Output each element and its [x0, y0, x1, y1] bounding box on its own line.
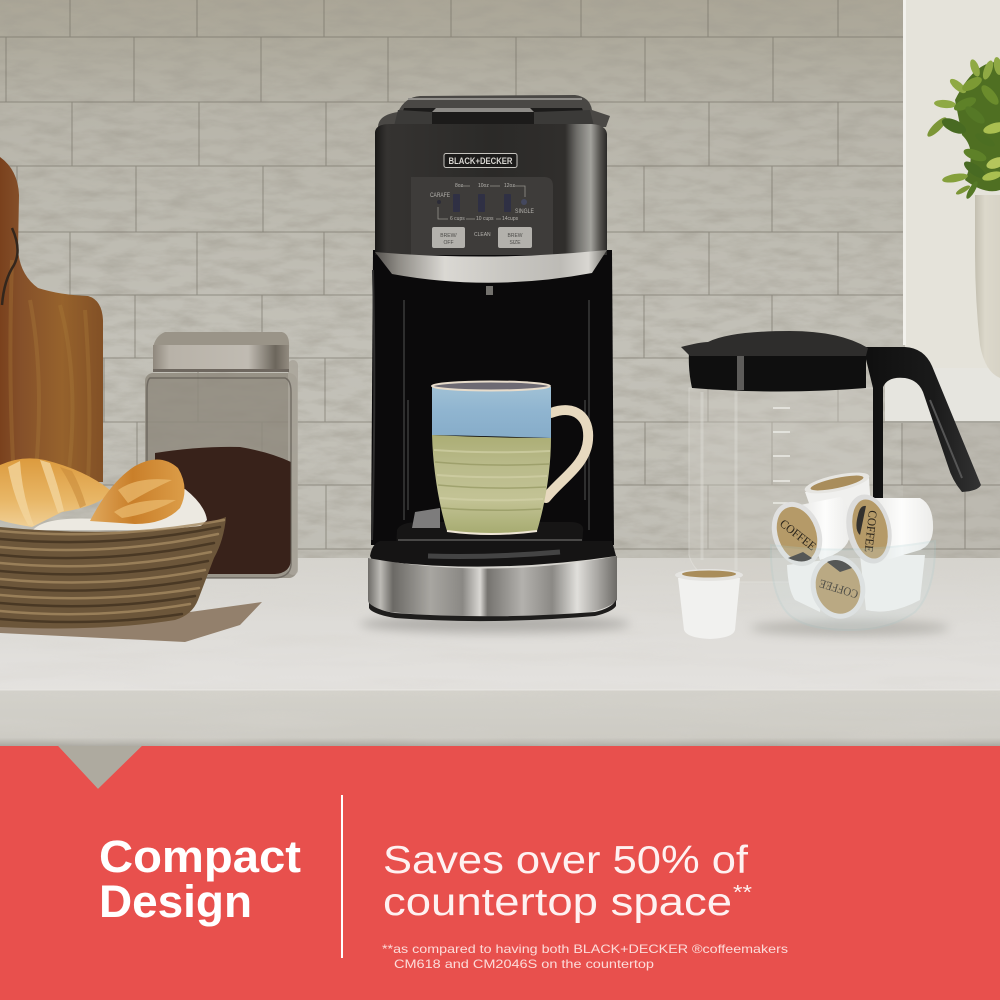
control labels: 6 cups: [450, 216, 465, 222]
right pod: [840, 490, 933, 568]
glass jar of ground coffee: [145, 332, 298, 578]
footnote: [382, 942, 788, 971]
mug green band: [432, 435, 551, 534]
main claim: Saves over 50% of: [383, 839, 748, 882]
drip tray: [396, 522, 583, 550]
glass bowl: [771, 541, 935, 630]
carafe glass: [689, 388, 876, 582]
control labels: 10 cups: [476, 216, 494, 222]
control labels: 12oz: [504, 183, 515, 189]
carafe handle: [863, 347, 981, 505]
coffee maker: [368, 95, 617, 621]
control labels: CLEAN: [474, 232, 491, 238]
basket: [0, 517, 226, 628]
ground coffee: [155, 447, 291, 574]
right pod: COFFEE: [862, 510, 880, 553]
footnote: **as compared to having both BLACK+DECKER ®coffeemakers: [382, 942, 788, 956]
main claim: countertop space: [383, 881, 732, 924]
brew off button: BREW/: [440, 233, 457, 239]
base ledge: [370, 541, 616, 567]
control labels: CARAFE: [430, 193, 450, 199]
front pod: [804, 549, 872, 625]
steel collar: [375, 250, 607, 283]
mug handle: [546, 410, 588, 498]
heading: [99, 831, 301, 927]
main claim: **: [733, 882, 752, 904]
mug rim: [432, 382, 550, 390]
vase: [975, 195, 1000, 378]
plant leaves: [925, 56, 1000, 200]
size selector slots: [437, 186, 527, 219]
mug blue band: [432, 382, 551, 438]
top lid: [378, 95, 610, 127]
brew size button: BREW: [508, 233, 523, 239]
carafe collar: [689, 352, 866, 392]
brew size button: [498, 227, 532, 248]
control panel: [411, 177, 553, 255]
heading: Design: [99, 876, 252, 927]
cutting board: [0, 157, 103, 482]
croissant right: [90, 459, 185, 524]
logo plate: [444, 154, 517, 168]
red caption panel: [0, 746, 1000, 1000]
control labels: SINGLE: [515, 209, 534, 215]
window recess and shelf: [885, 0, 1000, 563]
control labels: [430, 183, 534, 238]
left pod: [763, 495, 850, 573]
croissant left: [0, 458, 110, 527]
control labels: 8oz: [455, 183, 464, 189]
base foot: [369, 600, 616, 621]
left pod: COFFEE: [777, 516, 819, 553]
single coffee pod on counter: [675, 569, 743, 639]
main claim: [383, 839, 752, 924]
measure marks: [773, 408, 790, 503]
back pod: [803, 468, 871, 520]
divider: [341, 795, 343, 958]
lower body: [371, 250, 614, 545]
striped coffee mug: [432, 382, 588, 534]
coffee pods in glass bowl: [763, 468, 935, 630]
glass carafe: [681, 331, 981, 582]
steel base: [368, 556, 617, 617]
hanging cord: [2, 228, 18, 305]
plant in stone vase: [925, 56, 1000, 378]
steel lid: [153, 332, 289, 348]
brew off button: [432, 227, 465, 248]
control labels: 14cups: [502, 216, 519, 222]
marble countertop: [0, 558, 1000, 746]
control labels: 10oz: [478, 183, 489, 189]
white cloth: [33, 489, 207, 530]
stone tile wall: [0, 0, 905, 570]
wicker basket with croissants: [0, 458, 226, 628]
jar glass: [145, 373, 297, 578]
footnote: CM618 and CM2046S on the countertop: [394, 957, 654, 971]
carafe lid: [681, 331, 868, 356]
brew size button: SIZE: [509, 240, 521, 246]
brew off button: OFF: [444, 240, 454, 246]
napkin: [0, 602, 262, 642]
spout: [486, 286, 493, 295]
head unit: [375, 124, 607, 255]
logo plate: BLACK+DECKER: [448, 156, 513, 166]
front pod: COFFEE: [818, 576, 860, 602]
counter shadow notch: [58, 746, 142, 789]
lower pod bodies: [787, 555, 925, 612]
heading: Compact: [99, 831, 301, 882]
